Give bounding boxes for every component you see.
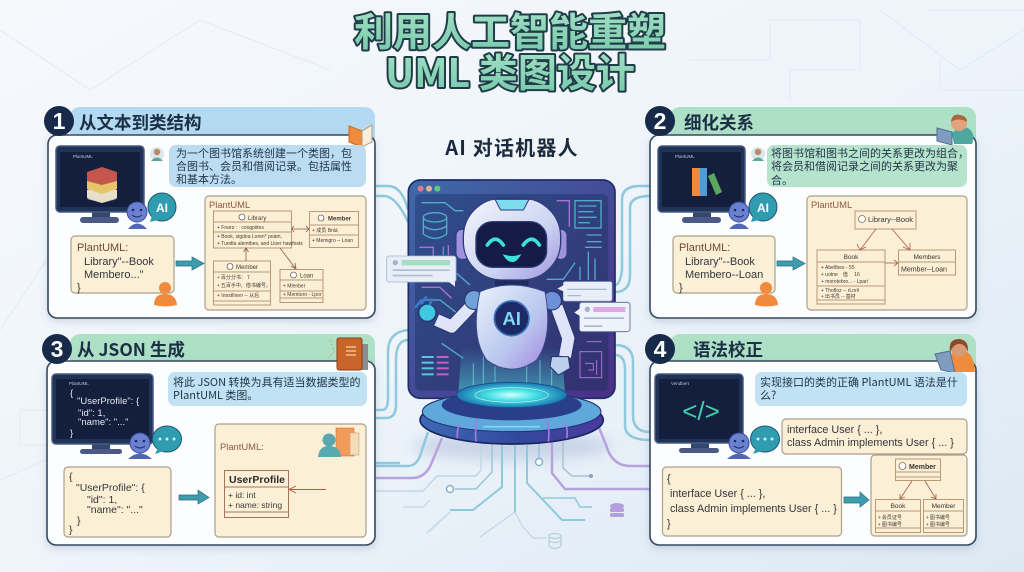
class: Book: + 会员证号 <box>878 514 902 521</box>
icon: person with laptop <box>935 339 975 373</box>
class: Book: + Abelíbes - 55 <box>821 265 855 271</box>
icon: open book <box>349 125 372 147</box>
code block: Library"--Book <box>685 256 755 268</box>
class: Member top <box>310 212 358 248</box>
platform <box>420 382 603 444</box>
code block: Membero..." <box>84 269 144 281</box>
icon: orange person <box>755 282 778 306</box>
code block: { <box>667 473 671 485</box>
UML diagram <box>807 196 967 310</box>
icon: robot with chat bubble <box>727 426 780 459</box>
code block: interface User { ... }, <box>670 488 765 500</box>
monitor with JSON: "id": 1, <box>78 408 105 419</box>
icon: database purple <box>610 503 624 517</box>
panel 4: syntax correction <box>645 334 976 545</box>
icon: user avatar <box>751 147 765 161</box>
hologram beam <box>458 347 565 393</box>
user prompt bubble: PlantUML 类图。 <box>173 387 258 403</box>
class: Book: Book <box>891 503 906 510</box>
user prompt bubble: 和基本方法。 <box>176 171 242 187</box>
class: UserProfile: UserProfile <box>229 474 285 486</box>
app window <box>408 180 615 398</box>
monitor with JSON: } <box>70 428 73 439</box>
class: Member bottom: Member <box>236 265 258 271</box>
heading: AI chatbot: AI 对话机器人 <box>444 132 579 161</box>
robot illustration <box>387 180 630 444</box>
class: Library <box>214 211 303 248</box>
panel 2 header <box>670 107 976 147</box>
user prompt bubble: 将图书馆和图书之间的关系更改为组合， <box>771 145 969 161</box>
user prompt bubble: 将此 JSON 转换为具有适当数据类型的 <box>173 374 360 390</box>
code block: } <box>667 518 671 530</box>
panel 3 body <box>47 361 375 545</box>
panel 2 number badge: 2 <box>654 108 666 134</box>
JSON block: "UserProfile": { <box>76 482 145 494</box>
icon: user avatar <box>150 147 164 161</box>
class: Member top: + 成员 Bnlá <box>312 227 338 234</box>
icon: person reading <box>937 115 973 145</box>
panel 4 number badge: 4 <box>654 336 667 362</box>
panel 4 body <box>650 361 976 545</box>
monitor with code icon: Vendbert <box>671 381 690 386</box>
panel 2 number badge <box>645 106 675 136</box>
user prompt bubble: 实现接口的类的正确 PlantUML 语法是什 <box>760 374 958 390</box>
class: Book: + 出书员 -- 基材 <box>821 293 856 300</box>
class: Library: + Book, stgdoa Loren* poàm, <box>217 234 282 240</box>
code block: Membero--Loan <box>685 269 763 281</box>
panel 3 number badge: 3 <box>51 336 63 362</box>
icon: robot with AI bubble <box>729 193 777 229</box>
icon: upright books <box>692 168 722 196</box>
user prompt bubble: 合图书、会员和借阅记录。包括属性 <box>176 158 352 174</box>
class: Library: + Tuodla alemtbes, and Lloer hawfosts <box>217 241 303 247</box>
class: UserProfile: + id: int <box>228 490 256 500</box>
UML diagram <box>205 196 366 310</box>
class: Book: Book <box>844 254 859 261</box>
class: Member bottom: Member <box>932 503 956 510</box>
class: Member top: + Memigro -- Loan <box>312 238 353 244</box>
arrow <box>176 257 204 270</box>
class: Member top: Member <box>328 216 352 222</box>
arrow <box>777 257 805 270</box>
class: Member bottom <box>214 261 271 305</box>
answer block <box>782 419 967 454</box>
relation arrows <box>900 481 936 499</box>
panel 4 header: 语法校正 <box>693 337 763 362</box>
class: Members <box>898 250 956 275</box>
user prompt bubble <box>755 372 967 406</box>
panel 1 header <box>70 107 375 147</box>
code block: PlantUML: <box>679 242 730 254</box>
monitor with books: PlantUML <box>73 154 93 159</box>
panel 3 number badge <box>42 334 72 364</box>
class: Members: Members <box>913 254 941 261</box>
monitor with code icon <box>655 374 743 453</box>
UML block: PlantUML: <box>220 441 264 452</box>
code block: PlantUML: <box>77 242 128 254</box>
panel 1 body <box>48 135 375 318</box>
class: Members: Member--Loan <box>901 266 947 274</box>
panel 4 header <box>670 334 976 374</box>
arrow <box>844 492 869 507</box>
UML diagram: PlantUML <box>811 199 852 210</box>
JSON block: { <box>69 471 73 483</box>
class: Library--Book: Library--Book <box>868 215 913 224</box>
code block: Library"--Book <box>84 256 154 268</box>
title: UML 类图设计 <box>385 43 635 99</box>
code block <box>673 236 775 294</box>
panel 3 header <box>70 334 375 374</box>
user prompt bubble: 将会员和借阅记录之间的关系更改为聚 <box>771 158 958 174</box>
class: UserProfile <box>224 470 288 518</box>
code block <box>662 467 842 536</box>
JSON block <box>64 467 171 537</box>
class: Loan: + Mlenber <box>283 284 306 290</box>
monitor with JSON: PlantUML <box>69 381 89 386</box>
chat bubbles <box>387 256 630 332</box>
platform shadow <box>412 432 612 460</box>
robot head <box>456 198 567 280</box>
icon: orange person <box>154 282 177 306</box>
class: Loan: + Memtoro - Lpor <box>283 292 322 298</box>
UML diagram: PlantUML <box>209 199 250 210</box>
icon: database outline <box>549 534 561 548</box>
relation arrows <box>857 229 910 266</box>
user prompt bubble <box>169 145 366 187</box>
monitor with JSON: { <box>70 388 73 399</box>
user prompt bubble: 合。 <box>771 172 793 188</box>
monitor with books: PlantUML <box>675 154 695 159</box>
robot body <box>476 279 548 369</box>
panel 2 header: 细化关系 <box>684 110 754 135</box>
robot arms <box>416 291 570 375</box>
relation arrows <box>244 226 309 269</box>
class: Member bottom: + 图书编号 <box>926 514 950 521</box>
class: Book: + Thofloz -- rLoril <box>821 288 859 294</box>
panel 3 header: 从 JSON 生成 <box>77 337 185 362</box>
answer block: class Admin implements User { ... } <box>787 437 954 449</box>
class: Loan: Loan <box>300 274 313 280</box>
monitor with JSON: "UserProfile": { <box>77 396 139 407</box>
class: Member bottom: + Innstlìnen -- 从后 <box>217 292 259 299</box>
monitor with code icon: </> <box>682 396 720 426</box>
class: Member bottom: + 图书编号 <box>926 521 950 528</box>
relation arrow <box>289 486 326 493</box>
user prompt bubble <box>767 145 969 188</box>
icon: robot with chat bubble <box>128 426 182 459</box>
panel 4 number badge <box>645 334 675 364</box>
panel 1: text to class structure <box>44 106 375 318</box>
title <box>354 2 666 99</box>
class: Member top: Member <box>909 464 936 471</box>
icon: robot with AI bubble: AI <box>156 201 168 215</box>
class: Book: + morotebro... - Lpari <box>821 279 868 285</box>
class: Library: + Fnaro : ∙ coogpiites <box>217 225 264 231</box>
title: 利用人工智能重塑 <box>354 2 666 58</box>
monitor with books <box>658 146 745 223</box>
JSON block: } <box>77 515 81 527</box>
icon: robot with AI bubble: AI <box>757 201 769 215</box>
monitor with books <box>56 146 144 223</box>
class: Member bottom: + 百分分书： 7 <box>217 274 250 281</box>
monitor with JSON <box>52 374 153 454</box>
class: Book: + 图书编号 <box>878 521 902 528</box>
UML block <box>215 424 366 537</box>
class: Loan <box>280 270 323 302</box>
class: Book <box>817 250 885 304</box>
panel 1 number badge <box>44 106 74 136</box>
code block: } <box>679 282 683 294</box>
icon: orange book <box>328 338 368 370</box>
class: Library: Library <box>248 216 266 222</box>
panel 1 number badge: 1 <box>53 108 66 134</box>
panel 1 header: 从文本到类结构 <box>79 110 202 135</box>
class: Member bottom <box>924 500 964 532</box>
class: Book <box>876 500 920 532</box>
robot body: AI <box>502 308 521 329</box>
user prompt bubble: 么? <box>760 387 776 403</box>
code block <box>71 236 174 294</box>
class: UserProfile: + name: string <box>228 500 282 510</box>
JSON block: "name": "..." <box>87 504 143 516</box>
icon: robot with AI bubble <box>127 193 176 229</box>
icon: person with books <box>318 428 359 457</box>
monitor with JSON: "name": "..." <box>78 417 128 428</box>
class: Book: + uotne 值 16 <box>821 271 860 278</box>
JSON block: "id": 1, <box>87 494 117 506</box>
user prompt bubble <box>168 372 367 406</box>
arrow <box>179 490 209 504</box>
icon: book stack <box>87 167 117 203</box>
UML block <box>871 455 967 536</box>
class: Member bottom: + 五百手中、借书编号。 <box>217 282 271 289</box>
panel 2 body <box>650 135 976 318</box>
panel 3: from JSON <box>42 334 375 545</box>
JSON block: } <box>69 524 73 536</box>
class: Library--Book <box>855 211 916 229</box>
code block: class Admin implements User { ... } <box>670 503 837 515</box>
answer block: interface User { ... }, <box>787 424 882 436</box>
panel 2: refine relationships <box>645 106 976 318</box>
user prompt bubble: 为一个图书馆系统创建一个类图，包 <box>176 145 352 161</box>
code block: } <box>77 282 81 294</box>
circuit lines <box>376 186 650 538</box>
